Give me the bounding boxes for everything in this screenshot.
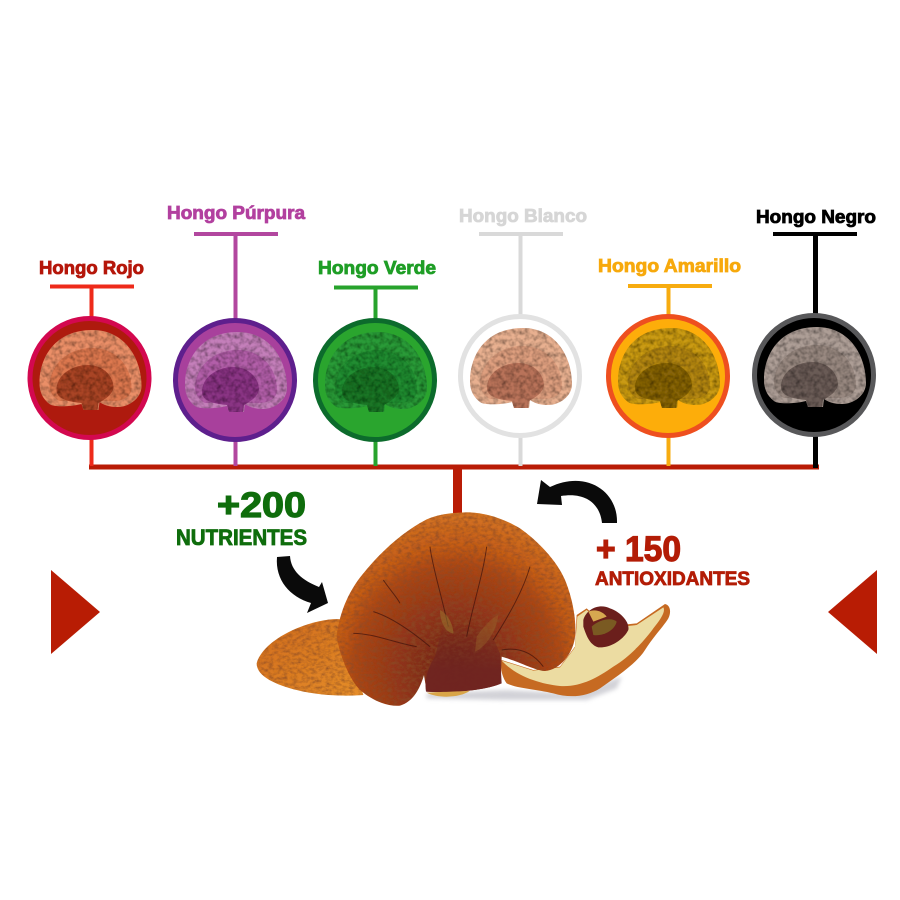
stem foot <box>427 691 470 697</box>
stat: +150 antioxidantes: ANTIOXIDANTES <box>595 569 750 590</box>
label: Hongo Púrpura: Hongo Púrpura <box>167 203 306 223</box>
branch: Hongo Rojo <box>39 258 144 466</box>
label: Hongo Rojo: Hongo Rojo <box>39 258 144 278</box>
arrow: pointing to mushroom from nutrientes <box>277 556 328 613</box>
highlights <box>440 610 453 633</box>
stat: +200 nutrientes: NUTRIENTES <box>176 525 307 550</box>
small stem knob <box>583 606 629 647</box>
label: Hongo Blanco: Hongo Blanco <box>459 206 587 226</box>
connector lines: central trunk and horizontal bar <box>89 464 819 517</box>
circle: white mushroom <box>460 316 580 436</box>
arrow: pointing to trunk from antioxidantes <box>537 480 617 523</box>
circle: red mushroom <box>30 318 149 438</box>
stat: +200 nutrientes <box>176 486 307 550</box>
circle: green mushroom <box>316 320 434 440</box>
triangle: right <box>828 570 877 654</box>
cracks <box>353 547 543 667</box>
triangle: left <box>51 570 100 654</box>
branch: Hongo Blanco <box>459 206 587 466</box>
branch: Hongo Verde <box>318 258 436 466</box>
stat: +200 nutrientes: +200 <box>217 486 306 525</box>
cream pore surface <box>502 607 664 686</box>
branch: Hongo Negro <box>756 207 876 468</box>
right underside cap <box>501 604 670 696</box>
circle: purple mushroom <box>176 320 294 440</box>
stat: +150 antioxidantes: + 150 <box>596 530 681 569</box>
branch: Hongo Púrpura <box>167 203 306 466</box>
stat: +150 antioxidantes <box>595 530 750 590</box>
circle: black mushroom <box>754 316 874 434</box>
stem <box>426 621 502 692</box>
main cap <box>337 512 575 706</box>
label: Hongo Verde: Hongo Verde <box>318 258 436 278</box>
label: Hongo Amarillo: Hongo Amarillo <box>598 256 741 276</box>
main mushroom photo illustration <box>257 512 670 706</box>
circle: yellow mushroom <box>608 316 728 436</box>
left small cap <box>257 619 363 696</box>
shadow <box>427 677 622 700</box>
branch: Hongo Amarillo <box>598 256 741 466</box>
label: Hongo Negro: Hongo Negro <box>756 207 876 227</box>
